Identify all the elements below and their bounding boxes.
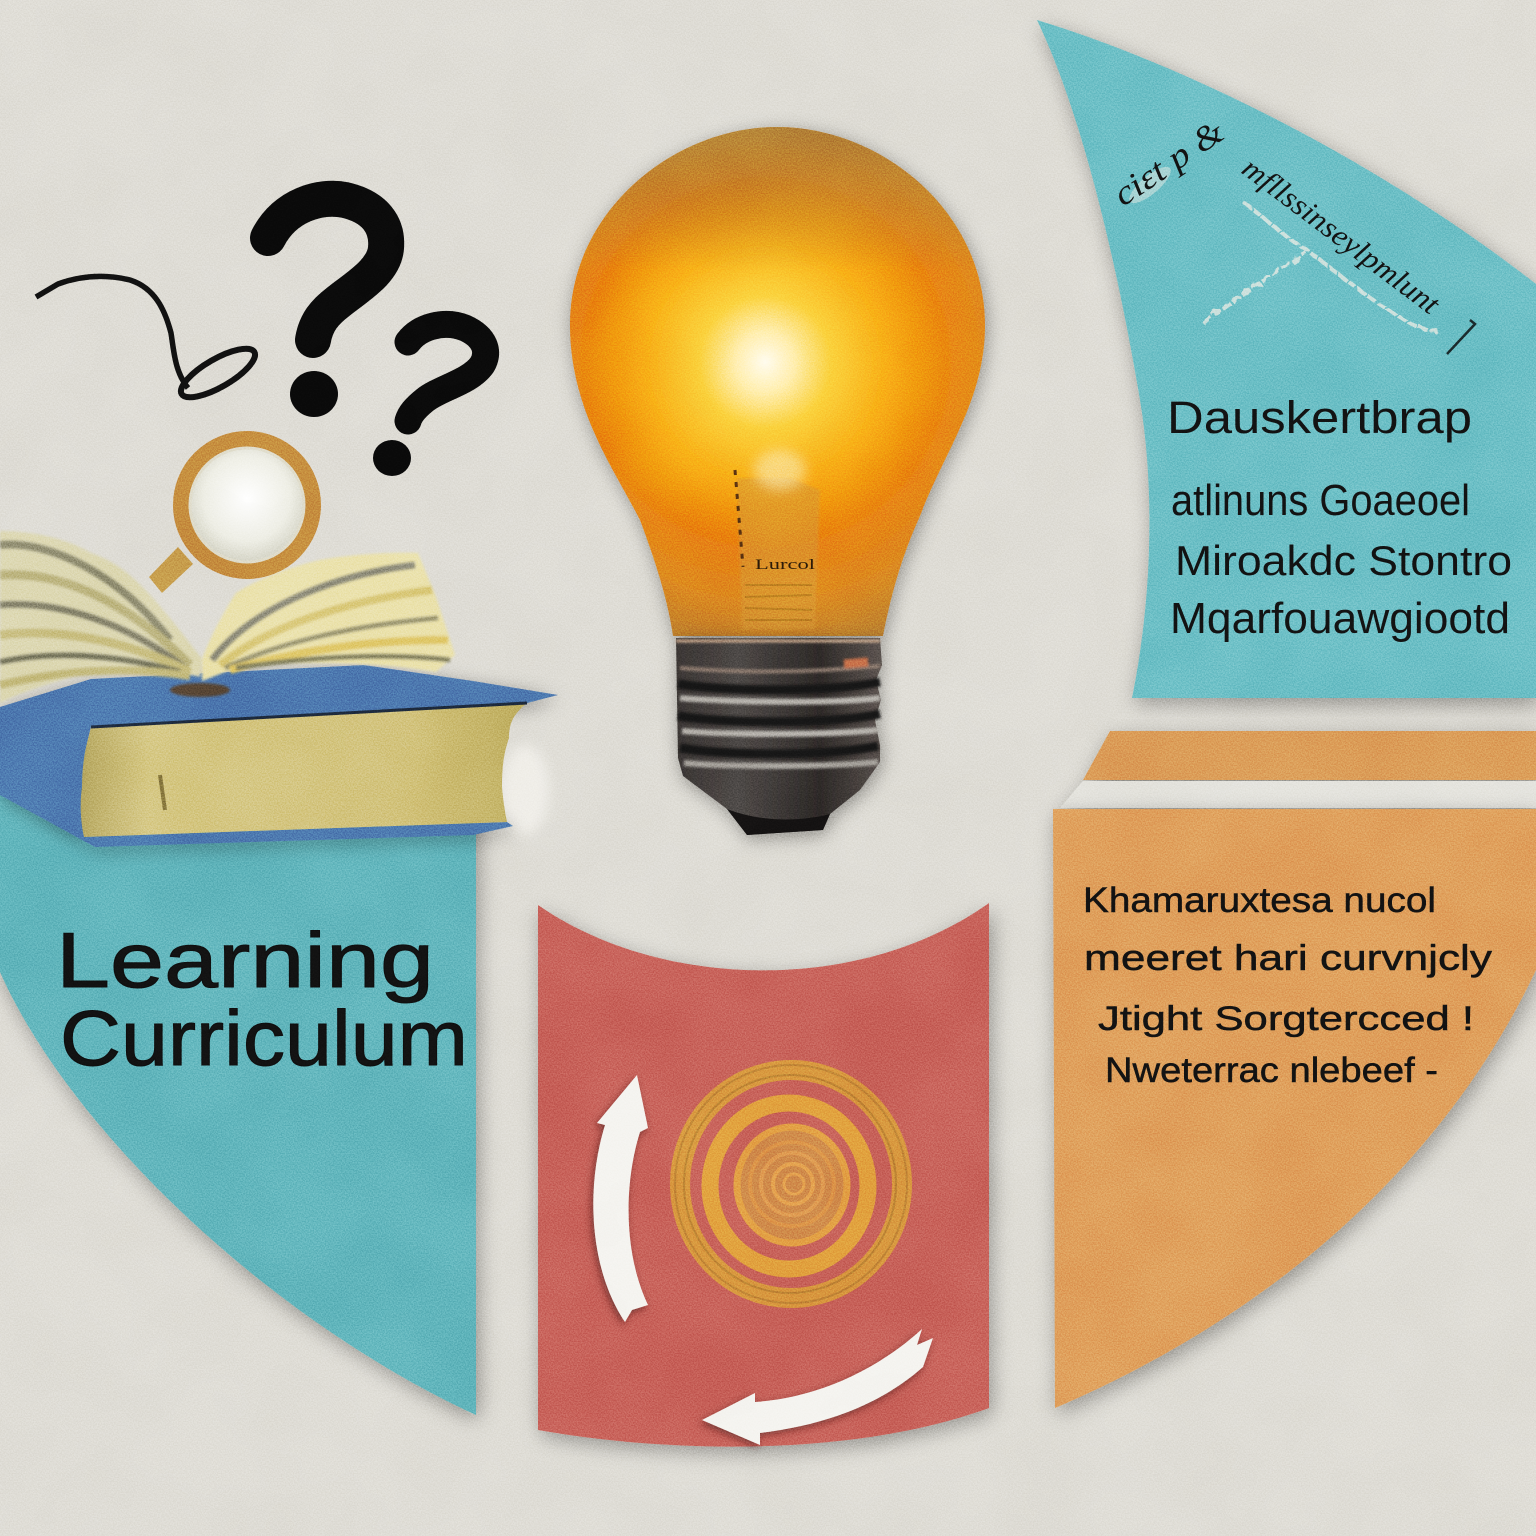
icon: spiral xyxy=(675,1065,907,1303)
text block: teal panel: Miroakdc Stontro xyxy=(1175,537,1512,584)
page block marks xyxy=(160,775,165,810)
filament stripes xyxy=(745,585,812,620)
bulb label: Lurcol xyxy=(755,557,815,573)
heading: Learning Curriculum: Curriculum xyxy=(60,994,468,1082)
text block: orange panel: Jtight Sorgtercced ! xyxy=(1098,1000,1474,1038)
filament dots xyxy=(735,470,743,567)
blue cover xyxy=(0,665,558,847)
chalk smudge behind scribble xyxy=(1124,161,1176,209)
filament area xyxy=(737,478,820,630)
text block: orange panel: Khamaruxtesa nucol xyxy=(1083,881,1436,920)
icon: magnifying glass xyxy=(149,440,312,593)
heading: Learning Curriculum xyxy=(56,916,468,1082)
open pages left xyxy=(0,531,202,703)
icon: question mark large xyxy=(268,199,386,417)
page block xyxy=(81,703,527,837)
bulb top tint xyxy=(570,127,985,325)
open pages right xyxy=(202,553,455,681)
text block: teal panel xyxy=(1167,392,1512,643)
text block: teal panel: Dauskertbrap xyxy=(1167,392,1472,443)
scribble tail xyxy=(1447,320,1475,354)
text block: teal panel: Mqarfouawgiootd xyxy=(1170,594,1510,643)
heading: Learning Curriculum: Learning xyxy=(56,916,434,1004)
light glow beside book xyxy=(501,745,549,835)
panel: orange strip xyxy=(1060,731,1536,808)
screw base xyxy=(676,638,882,835)
text block: orange panel xyxy=(1083,881,1492,1090)
text block: teal panel: atlinuns Goaeoel xyxy=(1171,476,1470,525)
icon: question mark small xyxy=(373,324,486,476)
icon: books xyxy=(0,531,558,847)
arrow: lower curved xyxy=(702,1329,933,1445)
handwritten scribble: diagonal line: mfllssinseylpmlunt xyxy=(1236,151,1446,321)
filament glow xyxy=(754,450,806,490)
panel: teal lower left xyxy=(0,790,476,1415)
icon: squiggle line xyxy=(36,277,261,406)
screw tip xyxy=(727,809,830,835)
arrow: up curved xyxy=(593,1075,648,1322)
panel: red bottom xyxy=(538,903,989,1447)
icon: light bulb xyxy=(570,127,985,835)
chalk scribble lines xyxy=(1203,202,1437,330)
panel: orange right xyxy=(1053,809,1536,1408)
screw threads xyxy=(676,641,880,766)
panel: top right teal xyxy=(1037,20,1536,698)
handwritten scribble: left cluster: ciɛt p & xyxy=(1107,113,1232,214)
cover top edge xyxy=(91,703,527,727)
spine shadow xyxy=(170,683,230,697)
text block: orange panel: meeret hari curvnjcly xyxy=(1084,937,1492,978)
text block: orange panel: Nweterrac nlebeef - xyxy=(1105,1051,1438,1090)
